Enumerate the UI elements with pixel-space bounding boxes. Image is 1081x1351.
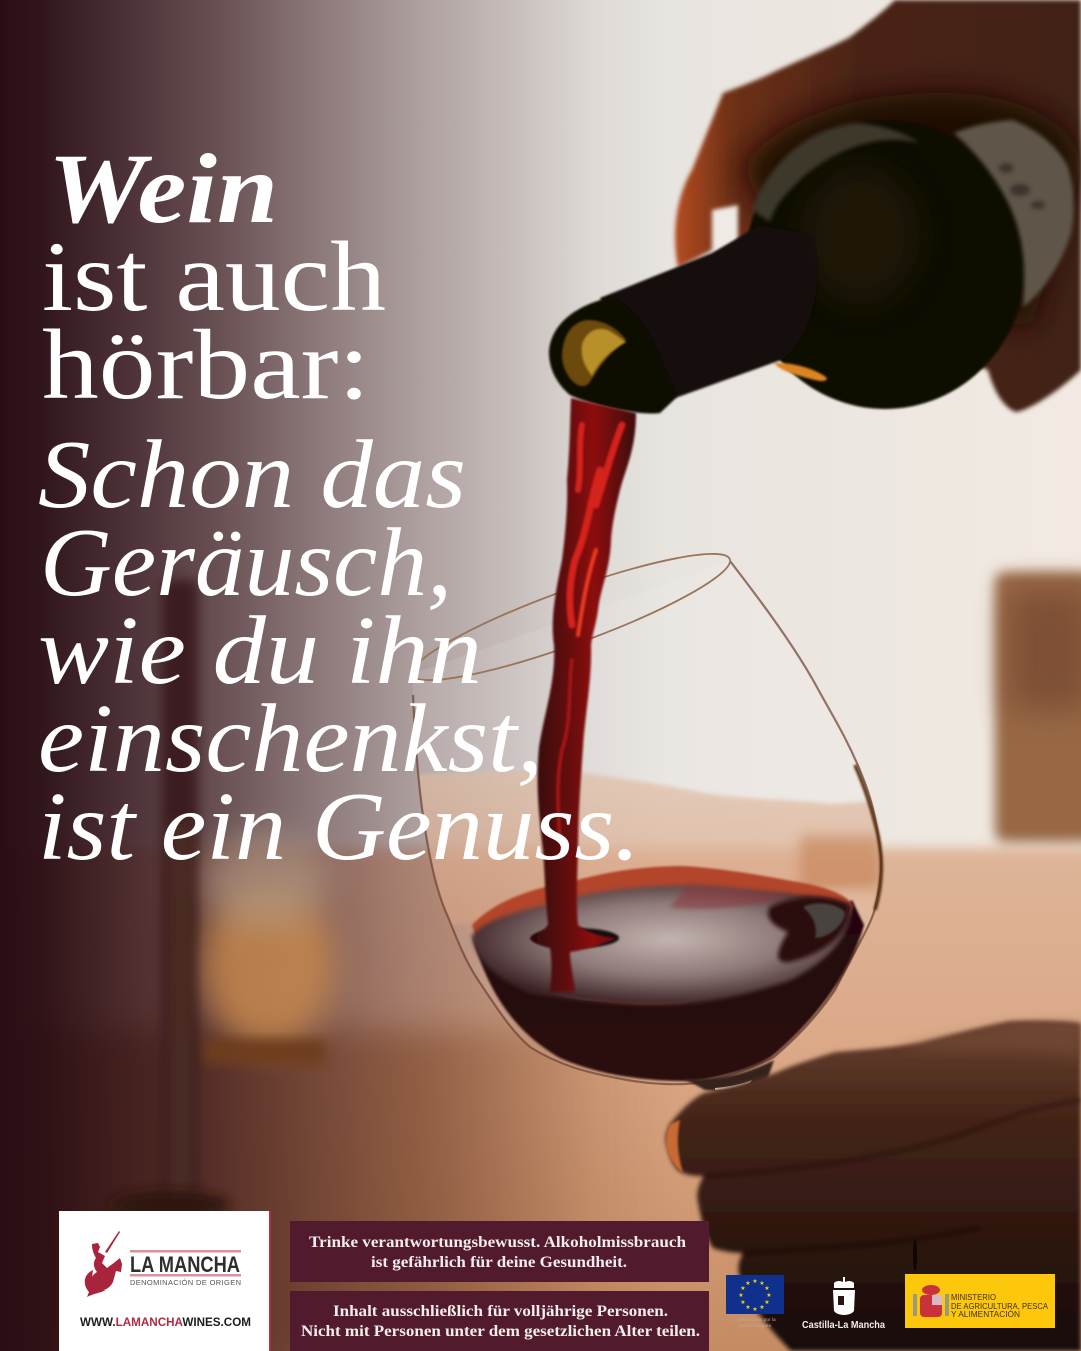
logo: Castilla-La Mancha — [802, 1277, 885, 1331]
logo subtitle: DENOMINACIÓN DE ORIGEN — [130, 1278, 241, 1287]
EU stars: ★ — [752, 1306, 758, 1313]
EU stars: ★ — [745, 1280, 751, 1287]
logo: Ministerio: DE AGRICULTURA, PESCA — [951, 1302, 1049, 1311]
upper hand — [675, 0, 1081, 412]
wine body — [472, 900, 864, 1081]
headline: Geräusch: Geräusch, — [40, 509, 452, 617]
spanish crest — [913, 1285, 949, 1317]
notice: responsible drinking — [290, 1221, 709, 1282]
wine stream — [530, 398, 636, 992]
logo: Ministerio: MINISTERIO — [951, 1293, 996, 1302]
logo: Castilla-La Mancha: Castilla-La Mancha — [802, 1319, 885, 1331]
logo: EU: Cofinanciado por la — [734, 1317, 776, 1323]
headline: Wein: Wein — [48, 133, 278, 244]
EU stars: ★ — [759, 1304, 765, 1311]
EU stars: ★ — [738, 1292, 744, 1299]
logo: Ministerio: Y ALIMENTACIÓN — [951, 1310, 1020, 1319]
shield — [833, 1290, 855, 1315]
EU stars: ★ — [752, 1278, 758, 1285]
headline: hörbar: hörbar: — [42, 309, 370, 420]
logo rule top — [130, 1250, 241, 1252]
EU stars: ★ — [759, 1280, 765, 1287]
logo rule bottom — [130, 1274, 241, 1276]
bottle neck — [600, 225, 817, 397]
notice: adults only — [290, 1291, 709, 1351]
notice: responsible drinking: Trinke verantwortungsbewusst. Alkoholmissbrauch — [309, 1234, 686, 1251]
bottle shoulder highlight — [752, 123, 919, 222]
headline: Schon das: Schon das — [38, 421, 466, 529]
EU stars: ★ — [766, 1292, 772, 1299]
wine glass — [400, 534, 890, 1100]
EU stars: ★ — [764, 1299, 770, 1306]
headline: ist ein Genuss: ist ein Genuss. — [38, 773, 640, 881]
EU stars: ★ — [740, 1285, 746, 1292]
headline: ist auch: ist auch — [42, 221, 386, 332]
bottle mouth — [549, 297, 677, 414]
wine rim — [472, 866, 853, 1004]
EU stars: ★ — [745, 1304, 751, 1311]
logo: EU — [726, 1275, 784, 1329]
EU stars: ★ — [764, 1285, 770, 1292]
candle glow — [168, 820, 334, 1210]
EU stars: ★ — [740, 1299, 746, 1306]
crown — [834, 1277, 854, 1288]
wine surface — [472, 886, 852, 1005]
notice: adults only: Nicht mit Personen unter dem gesetzlichen Alter teilen. — [301, 1323, 700, 1340]
notice: responsible drinking: ist gefährlich für deine Gesundheit. — [371, 1254, 627, 1271]
logo: Ministerio — [905, 1274, 1055, 1328]
glass outline — [413, 561, 881, 1084]
notice: adults only: Inhalt ausschließlich für volljährige Personen. — [333, 1303, 668, 1320]
glass rim — [403, 534, 739, 700]
bottle — [549, 120, 1074, 414]
headline: einschenkst: einschenkst, — [38, 685, 543, 793]
EU stars — [738, 1278, 772, 1313]
website url: WWW.LAMANCHAWINES.COM — [80, 1317, 251, 1329]
logo: EU: Unión Europea — [739, 1323, 771, 1329]
stream highlights — [558, 425, 622, 840]
lower hand — [666, 1020, 1081, 1351]
headline — [38, 133, 640, 881]
bottle label — [954, 120, 1074, 307]
logo panel: La Mancha — [59, 1211, 271, 1351]
headline: wie du ihn: wie du ihn — [38, 597, 482, 705]
logo name: LA MANCHA — [130, 1252, 240, 1277]
icon: knight on horse — [85, 1231, 122, 1297]
glass foot — [683, 1060, 774, 1090]
